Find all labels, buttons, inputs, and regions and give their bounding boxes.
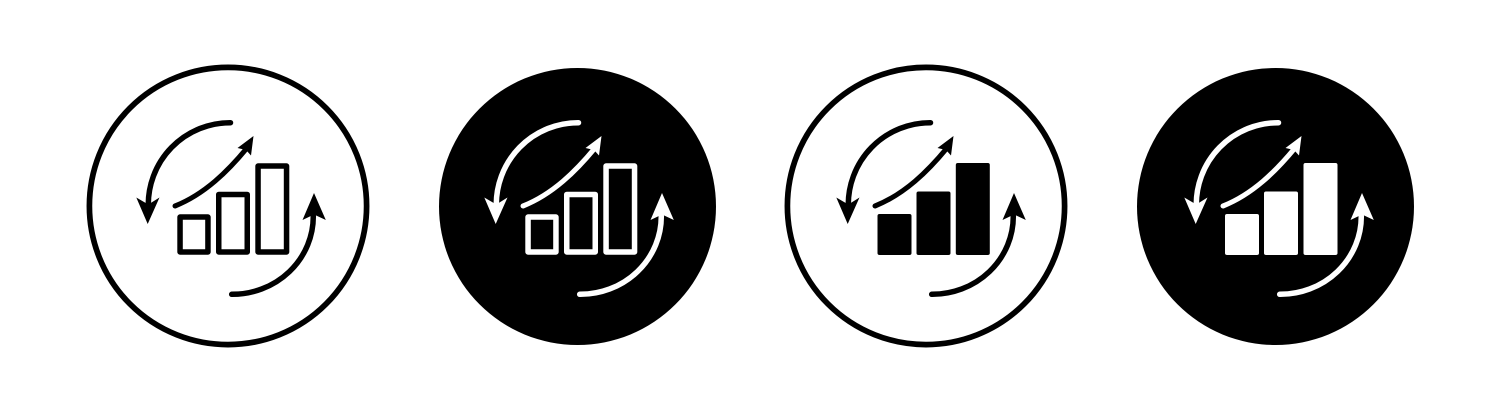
- bar chart: solid bars: [878, 163, 990, 255]
- arrow: bottom circular arrow: [580, 193, 674, 294]
- bar chart: outlined bars: [528, 166, 635, 252]
- arrow: top circular arrow: [836, 123, 930, 224]
- arrow: bottom circular arrow: [932, 193, 1026, 294]
- arrow: rising trend: [523, 136, 602, 206]
- arrow: top circular arrow: [136, 123, 230, 224]
- arrow: top circular arrow: [484, 123, 578, 224]
- arrow: rising trend: [1223, 136, 1302, 206]
- circle outline: [787, 67, 1065, 345]
- icon 4: solid circle with solid bars: [1137, 68, 1414, 345]
- arrow: rising trend: [175, 136, 254, 206]
- arrow: rising trend: [875, 136, 954, 206]
- bar chart: outlined bars: [180, 166, 287, 252]
- arrow: top circular arrow: [1184, 123, 1278, 224]
- arrow: bottom circular arrow: [232, 193, 326, 294]
- icon 3: outlined circle with solid bars: [787, 67, 1065, 345]
- arrow: bottom circular arrow: [1280, 193, 1374, 294]
- icon 2: solid circle with outlined bars: [439, 68, 716, 345]
- solid circle: [1137, 68, 1414, 345]
- solid circle: [439, 68, 716, 345]
- circle outline: [89, 67, 367, 345]
- bar chart: solid bars: [1225, 163, 1338, 255]
- icon 1: outlined circle with outlined bars: [89, 67, 367, 345]
